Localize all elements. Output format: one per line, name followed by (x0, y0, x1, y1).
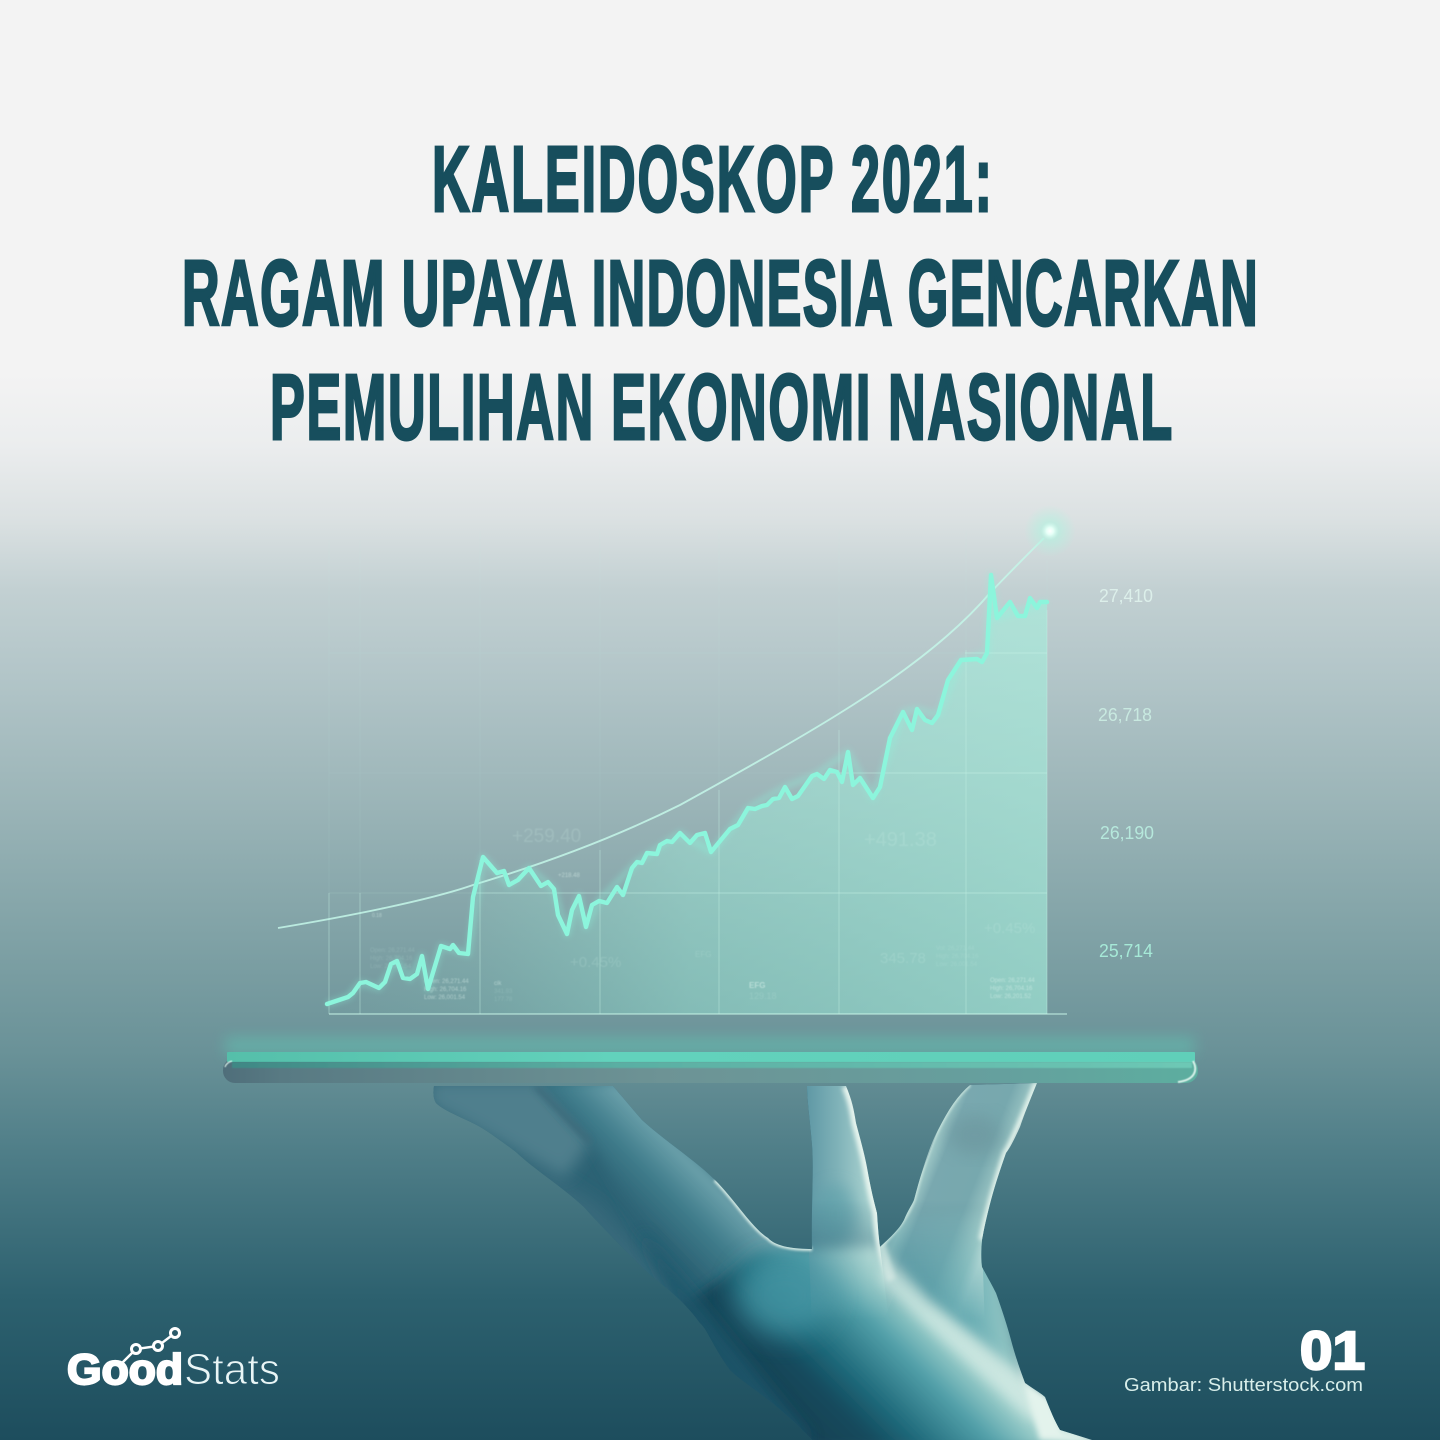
faint chart labels: Vol: 26,271.44 (936, 946, 975, 952)
small chart labels: +218.48 (558, 873, 581, 879)
title: PEMULIHAN EKONOMI NASIONAL (270, 355, 1172, 459)
main palm (660, 1245, 1110, 1440)
axis values: 25,714 (1099, 941, 1153, 961)
faint chart labels: +259.40 (512, 826, 581, 847)
thumb (428, 1080, 592, 1178)
GoodStats logo (67, 1328, 280, 1394)
price line glow (327, 575, 1047, 1004)
faint chart labels: EFG (695, 950, 711, 959)
faint chart labels: Open: 26,271.44 (370, 948, 415, 954)
ring finger rim lights (982, 1083, 1037, 1240)
faint chart labels: High: 26,704.16 (370, 956, 413, 962)
axis values (1098, 586, 1154, 961)
tablet glowing screen (227, 1052, 1195, 1062)
glowing dot (1024, 505, 1076, 557)
small chart labels: 0.18 (372, 913, 382, 919)
tablet body (223, 1058, 1198, 1083)
palm teal patch (737, 1255, 833, 1335)
tablet edge highlights (1178, 1061, 1195, 1082)
chart grid (329, 530, 1067, 1014)
trend curve (278, 538, 1044, 928)
index finger (551, 1086, 800, 1276)
small chart labels: EFG (749, 981, 765, 990)
small chart labels (372, 873, 1035, 1001)
glow above the tablet (225, 1037, 1195, 1055)
faint chart labels: Low: 26,001.54 (936, 962, 978, 968)
tablet lower strip (232, 1062, 1192, 1068)
hand base tone (433, 1083, 1037, 1246)
tablet (223, 1052, 1198, 1083)
wrist rim (1013, 1352, 1088, 1440)
lower outer edge tone (555, 1182, 654, 1278)
faint chart labels: 129.18 (749, 991, 777, 1001)
faint chart labels: 177.78 (494, 997, 513, 1003)
small chart labels: cik (494, 981, 502, 987)
logo growth line (122, 1328, 180, 1363)
ring finger joint tone (949, 1119, 1002, 1151)
small chart labels: Low: 26,201.52 (990, 994, 1032, 1000)
page number: 01 (1300, 1321, 1365, 1381)
title: KALEIDOSKOP 2021: (432, 127, 992, 231)
faint chart labels: 345.78 (880, 950, 926, 967)
faint chart labels: 341.93 (494, 989, 513, 995)
faint chart labels (370, 826, 1035, 1003)
index web rim (715, 1180, 812, 1249)
GoodStats logo: Stats (184, 1345, 280, 1394)
small chart labels: High: 26,704.16 (990, 986, 1033, 992)
ring finger left rim (880, 1085, 970, 1247)
line chart hologram (278, 505, 1154, 1014)
small chart labels: Open: 26,271.44 (990, 978, 1035, 984)
knuckle ridge highlight (880, 1262, 1045, 1420)
axis values: 27,410 (1099, 586, 1153, 606)
middle finger rim light (846, 1086, 892, 1280)
faint chart labels: Low: 26,001.54 (370, 964, 412, 970)
logo wordmark: Good (67, 1346, 183, 1394)
chart area fill (327, 575, 1047, 1014)
title: RAGAM UPAYA INDONESIA GENCARKAN (182, 241, 1258, 345)
faint chart labels: High: 26,704.16 (936, 954, 979, 960)
image credit: Gambar: Shutterstock.com (1124, 1375, 1363, 1395)
faint chart labels: +0.45% (570, 954, 621, 971)
palm shadow on left (648, 1255, 802, 1428)
small chart labels: High: 26,704.16 (424, 987, 467, 993)
title (182, 127, 1258, 459)
hand holding the tablet (420, 1080, 1110, 1440)
faint chart labels: +491.38 (864, 829, 937, 851)
axis values: 26,190 (1100, 823, 1154, 843)
finger separation (538, 1090, 570, 1124)
ring finger (880, 1083, 1037, 1311)
ring metacarpal (888, 1214, 1030, 1386)
middle finger (807, 1086, 882, 1306)
faint chart labels: +0.45% (984, 920, 1035, 937)
small chart labels: Open: 26,271.44 (424, 979, 469, 985)
price line (327, 575, 1047, 1004)
small chart labels: Low: 26,001.54 (424, 995, 466, 1001)
axis values: 26,718 (1098, 705, 1152, 725)
